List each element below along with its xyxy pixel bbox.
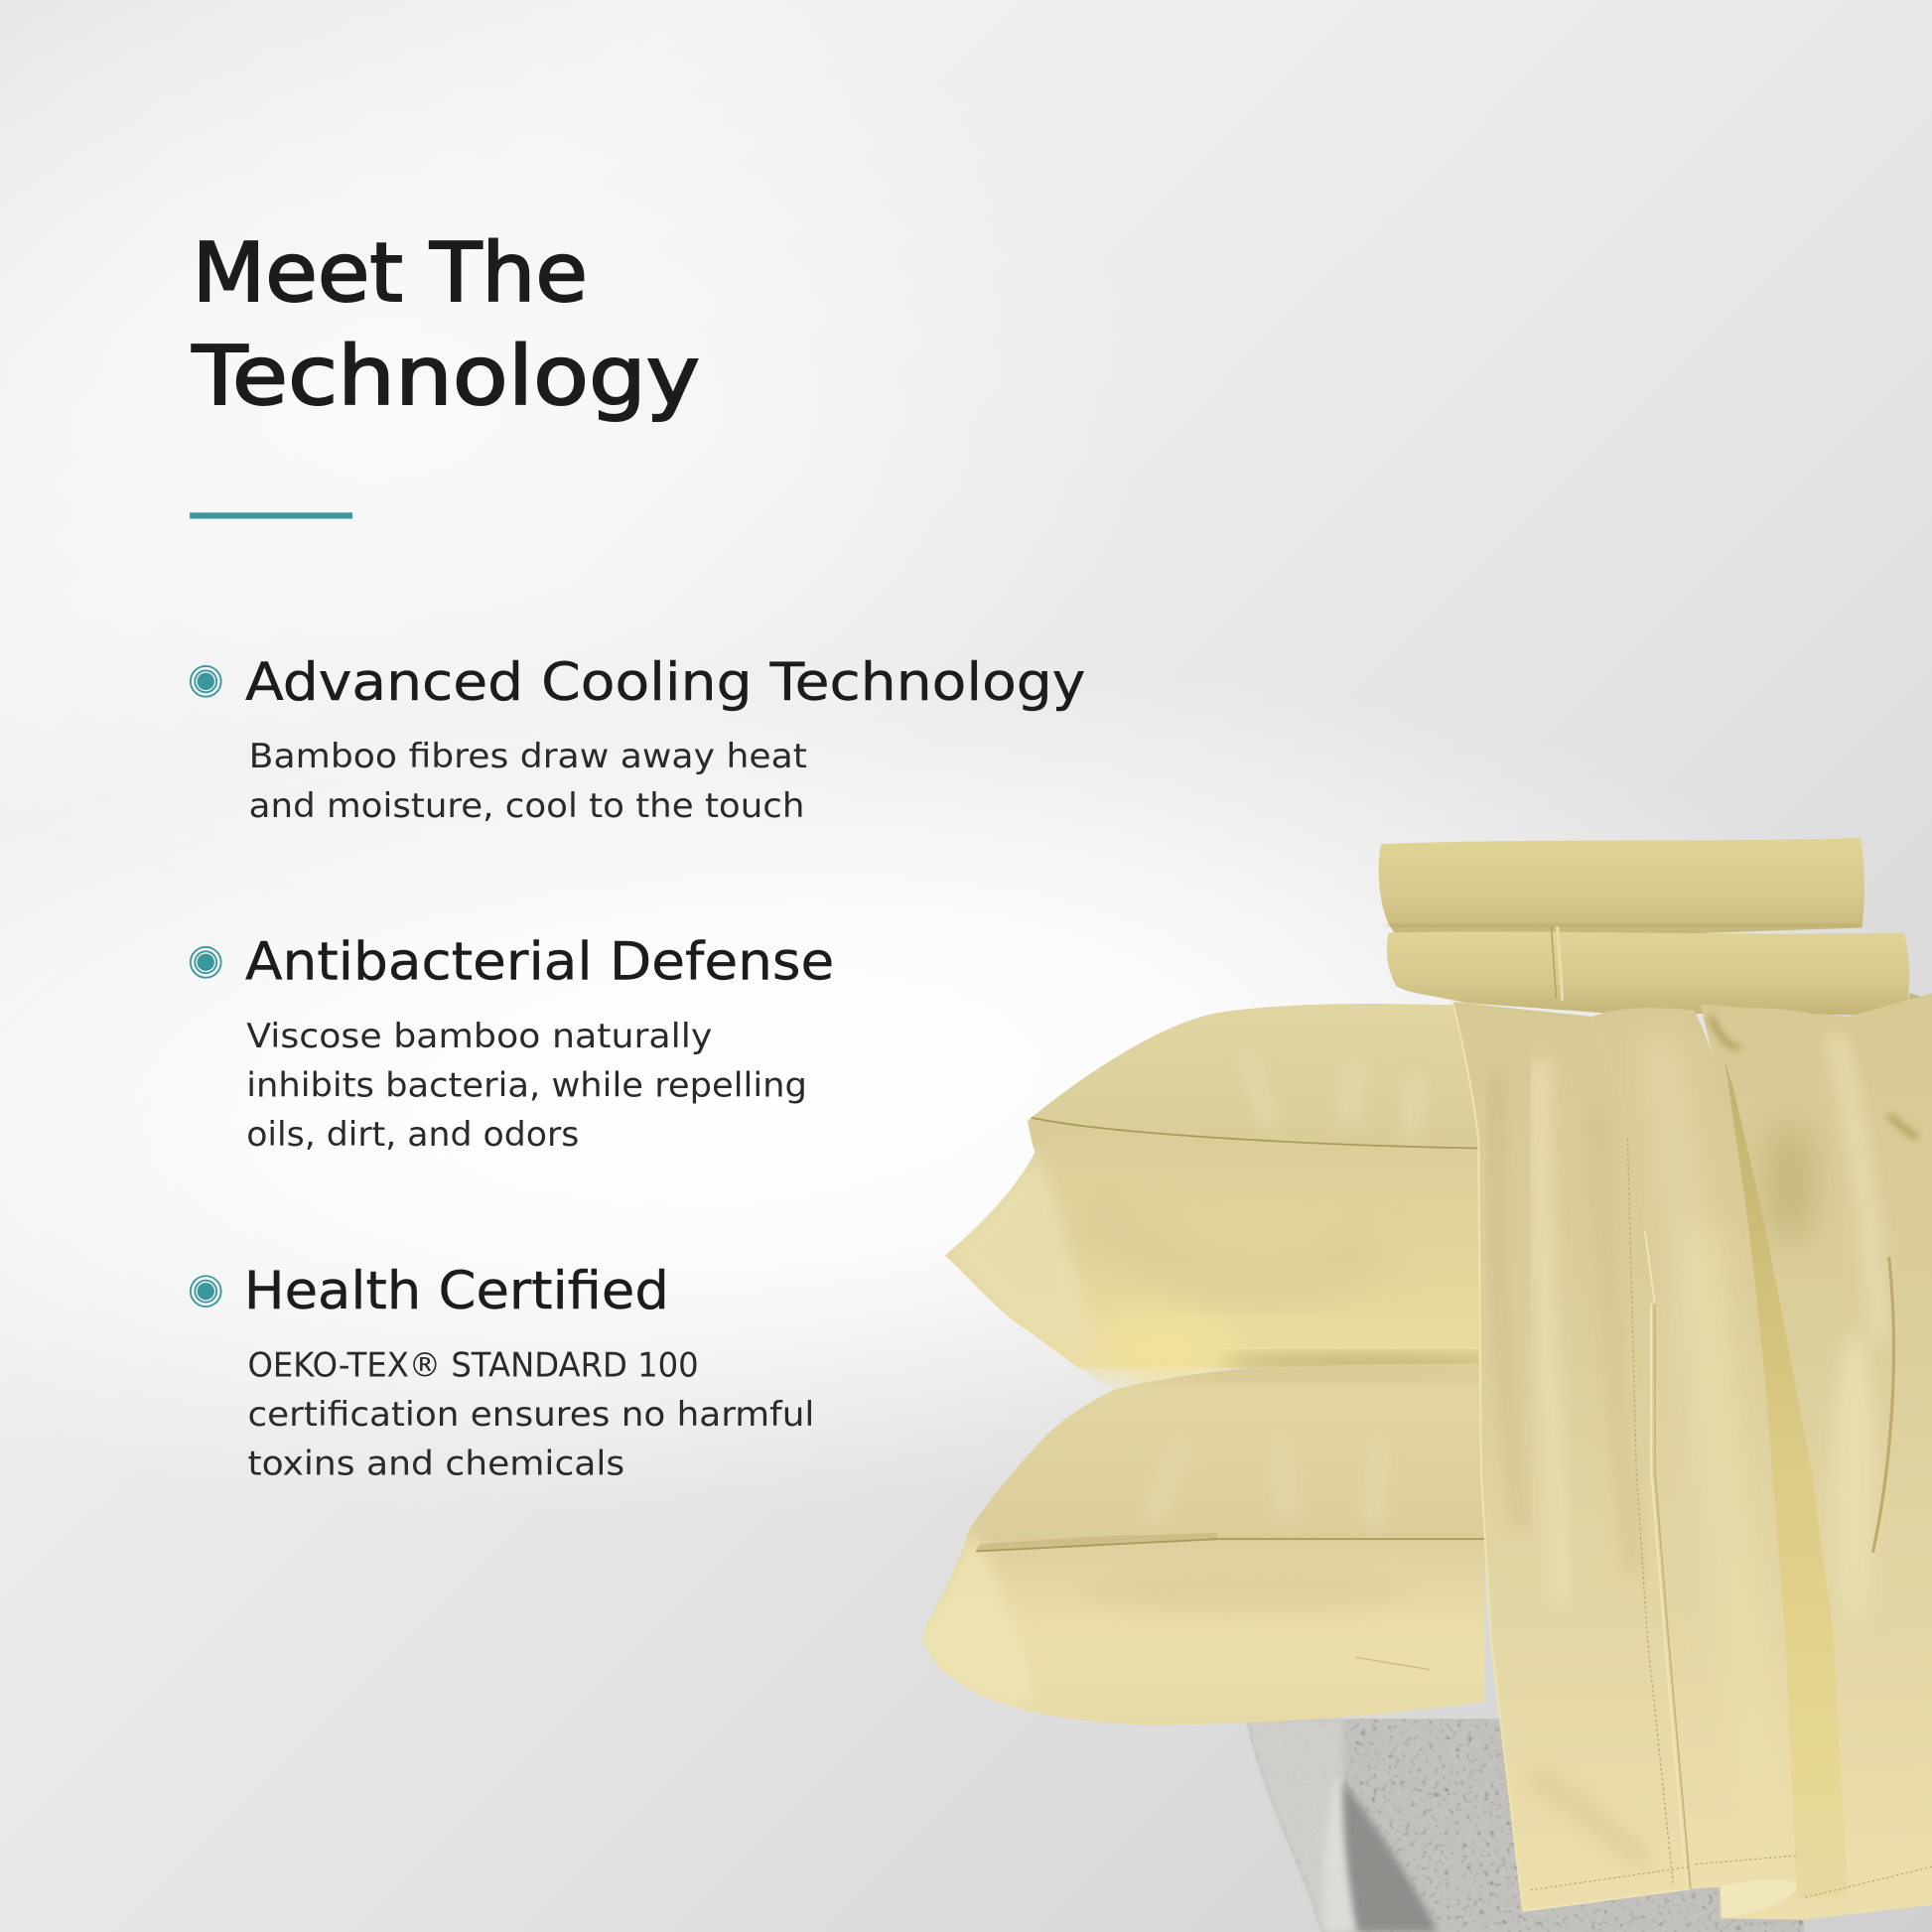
health description [247,1345,814,1483]
icon: antibacterial bullet [191,947,221,978]
feature: health certified [191,1262,814,1483]
sheet second panel [1589,998,1805,1897]
sheet third panel [1720,1009,1888,1886]
top pillow [936,998,1516,1390]
bottom pillow [923,1364,1485,1725]
product photo: bedding stack on stone [918,838,1932,1932]
sheet right layer [1701,993,1932,1920]
antibacterial description: oils, dirt, and odors [246,1115,579,1154]
antibacterial description: Viscose bamboo naturally [246,1017,712,1055]
rolled sheet top [1379,838,1864,936]
sheet hem lines [1452,1002,1932,1911]
antibacterial description: inhibits bacteria, while repelling [246,1066,807,1105]
bottom pillow flange [935,1538,1025,1700]
stone pedestal [1246,1719,1804,1932]
health description: OEKO-TEX® STANDARD 100 [247,1345,699,1384]
draped sheet [1448,993,1932,1922]
title: Meet The [193,226,588,321]
health description: certification ensures no harmful [247,1395,814,1434]
cooling description [249,737,807,825]
icon: cooling bullet [191,666,221,697]
title: Technology [191,330,700,424]
cooling description: Bamboo fibres draw away heat [249,737,807,775]
health heading: Health Certified [244,1262,669,1321]
sheet corner curl [1721,1879,1797,1918]
title [191,226,700,424]
icon: health bullet [191,1276,221,1307]
antibacterial heading: Antibacterial Defense [245,933,834,993]
cooling description: and moisture, cool to the touch [249,786,804,825]
title divider [190,512,352,518]
antibacterial description [246,1017,807,1154]
feature: antibacterial defense [191,933,834,1154]
feature: advanced cooling technology [191,653,1085,825]
sheet first panel [1448,998,1694,1916]
cooling heading: Advanced Cooling Technology [245,653,1085,713]
top pillow flange [945,1152,1114,1390]
health description: toxins and chemicals [247,1445,624,1483]
sheet gold gap [1719,1029,1849,1897]
sheet tuck shadows [1711,1017,1917,1139]
rolled sheet lower [1387,926,1932,1016]
